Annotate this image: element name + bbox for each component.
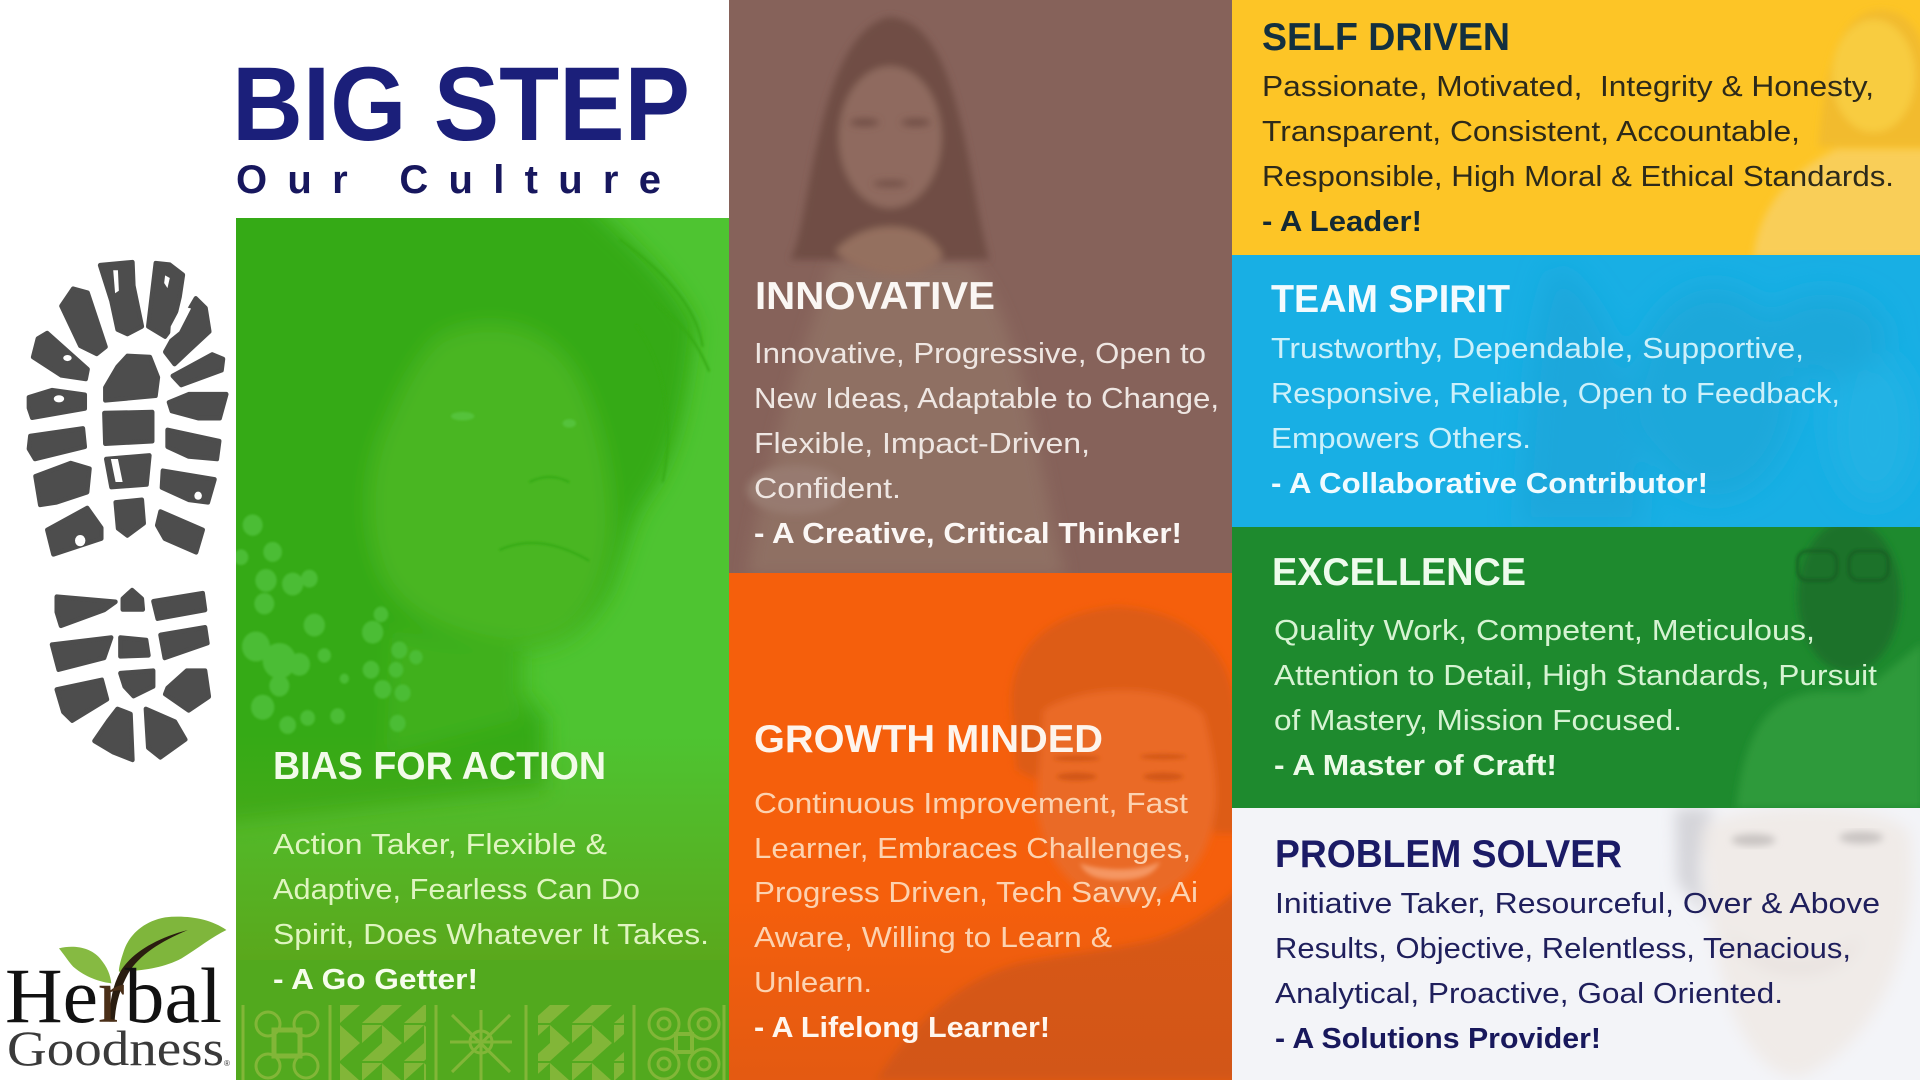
panel: problem solver (1232, 807, 1920, 1080)
photo: smiling man (877, 607, 1243, 1080)
photo: man with glasses (1736, 520, 1920, 808)
text block: bias for action traits (273, 829, 709, 951)
text block: problem solver traits: Analytical, Proactive, Goal Oriented. (1275, 978, 1783, 1010)
photo: woman with curly hair (209, 189, 709, 825)
panel: growth minded (729, 573, 1243, 1080)
text block: growth minded traits: Aware, Willing to Learn & (754, 922, 1112, 954)
tagline: lifelong learner: - A Lifelong Learner! (754, 1012, 1050, 1044)
logo word: Herbal: Herbal (5, 952, 222, 1039)
text block: growth minded traits: Progress Driven, Tech Savvy, Ai (754, 877, 1198, 909)
registered mark: ® (224, 1059, 230, 1068)
tagline: master of craft: - A Master of Craft! (1274, 750, 1557, 782)
heading: team spirit: TEAM SPIRIT (1271, 278, 1510, 321)
text block: innovative traits: Flexible, Impact-Driven, (754, 428, 1090, 460)
text block: innovative traits: Innovative, Progressive, Open to (754, 338, 1206, 370)
text block: team spirit traits: Empowers Others. (1271, 423, 1531, 455)
text block: innovative traits: Confident. (754, 473, 901, 505)
photo: smiling person (1675, 807, 1913, 1078)
text block: bias for action traits: Spirit, Does Whatever It Takes. (273, 919, 709, 951)
text block: growth minded traits (754, 788, 1198, 999)
panel: bias for action (209, 189, 729, 1080)
text block: innovative traits: New Ideas, Adaptable to Change, (754, 383, 1219, 415)
heading: self driven: SELF DRIVEN (1262, 16, 1510, 59)
text block: growth minded traits: Continuous Improvement, Fast (754, 788, 1188, 820)
logo leaves (59, 917, 226, 1022)
heading: bias for action: BIAS FOR ACTION (273, 745, 606, 788)
tagline: solutions provider: - A Solutions Provider! (1275, 1023, 1601, 1055)
heading: problem solver: PROBLEM SOLVER (1275, 833, 1622, 876)
text block: team spirit traits (1271, 333, 1840, 455)
panel: excellence (1232, 520, 1920, 808)
text block: problem solver traits: Initiative Taker, Resourceful, Over & Above (1275, 888, 1880, 920)
title block (232, 46, 690, 202)
text block: self driven traits: Transparent, Consistent, Accountable, (1262, 116, 1800, 148)
icon: boot print (29, 262, 226, 760)
decorative pattern band (243, 1005, 724, 1080)
text block: excellence traits: of Mastery, Mission Focused. (1274, 705, 1682, 737)
text block: excellence traits: Quality Work, Competent, Meticulous, (1274, 615, 1815, 647)
logo: Herbal Goodness (5, 917, 230, 1076)
text block: self driven traits (1262, 71, 1894, 193)
text block: team spirit traits: Responsive, Reliable, Open to Feedback, (1271, 378, 1840, 410)
text block: problem solver traits (1275, 888, 1880, 1010)
panel: team spirit (1232, 255, 1920, 527)
text block: excellence traits (1274, 615, 1877, 737)
heading: innovative: INNOVATIVE (755, 275, 995, 318)
text block: growth minded traits: Learner, Embraces Challenges, (754, 833, 1191, 865)
heading: excellence: EXCELLENCE (1272, 551, 1526, 594)
tagline: collaborative contributor: - A Collaborative Contributor! (1271, 468, 1708, 500)
tagline: creative critical thinker: - A Creative, Critical Thinker! (754, 518, 1182, 550)
tagline: a leader: - A Leader! (1262, 206, 1422, 238)
panel: self driven (1232, 0, 1920, 257)
photo: woman resting chin on hand (747, 17, 1065, 576)
photo: laughing woman (1753, 10, 1920, 257)
text block: innovative traits (754, 338, 1219, 505)
text block: team spirit traits: Trustworthy, Dependable, Supportive, (1271, 333, 1804, 365)
text block: growth minded traits: Unlearn. (754, 967, 872, 999)
tagline: a go getter: - A Go Getter! (273, 964, 478, 996)
logo word: Goodness: Goodness (7, 1020, 224, 1076)
text block: bias for action traits: Adaptive, Fearless Can Do (273, 874, 640, 906)
text block: bias for action traits: Action Taker, Flexible & (273, 829, 607, 861)
subtitle: Our Culture: Our Culture (236, 158, 661, 202)
title: BIG STEP: BIG STEP (232, 46, 690, 163)
text block: problem solver traits: Results, Objective, Relentless, Tenacious, (1275, 933, 1851, 965)
text block: self driven traits: Responsible, High Moral & Ethical Standards. (1262, 161, 1894, 193)
text block: excellence traits: Attention to Detail, High Standards, Pursuit (1274, 660, 1877, 692)
panel: innovative (729, 0, 1232, 576)
text block: self driven traits: Passionate, Motivated, Integrity & Honesty, (1262, 71, 1874, 103)
heading: growth minded: GROWTH MINDED (754, 718, 1103, 761)
photo: blurred team faces (1542, 303, 1898, 508)
